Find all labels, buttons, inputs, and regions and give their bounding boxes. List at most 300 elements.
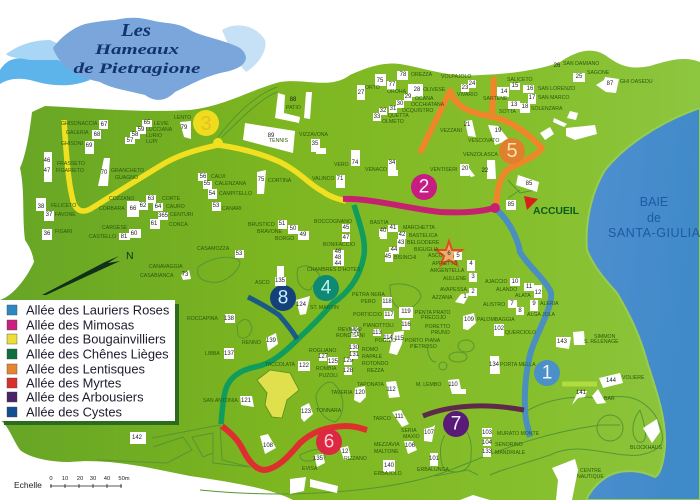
numbered plots: 142 [132, 435, 143, 441]
numbered plots: 85 [508, 202, 515, 208]
accueil label: ACCUEIL [533, 205, 580, 217]
bay label: BAIE [640, 195, 668, 209]
village names: BISINCHI [394, 255, 416, 261]
numbered plots: 8 [518, 308, 522, 314]
numbered plots: 45 [385, 254, 392, 260]
village names: RENNO [242, 340, 261, 346]
route 6: Allée des Myrtes [222, 426, 367, 470]
numbered plots: 38 [38, 204, 45, 210]
village names: PIANOTTOLI [363, 323, 394, 329]
village names: S. RELENAGE [584, 339, 619, 345]
numbered plots: 60 [131, 231, 138, 237]
village names: FELICETO [51, 203, 76, 209]
village names: CANAVAGGIA [149, 264, 183, 270]
route 1: Allée des Lauriers Roses [498, 211, 551, 437]
numbered plots: 51 [279, 221, 286, 227]
route 3: Allée des Bougainvilliers [64, 120, 346, 211]
village names: ERBALUNGA [417, 467, 450, 473]
numbered plots: 10 [512, 279, 519, 285]
scale bar: 0 [49, 476, 53, 482]
numbered plots: 110 [448, 382, 458, 388]
numbered plots: 120 [355, 390, 366, 396]
numbered plots: 141 [576, 390, 587, 396]
village names: QUETTA [388, 113, 409, 119]
village names: OREZZA [411, 72, 433, 78]
marker 2 [411, 174, 437, 200]
numbered plots: 5 [456, 253, 460, 259]
numbered plots: 53 [236, 251, 243, 257]
marker 4 [313, 275, 339, 301]
numbered plots: 48 [335, 255, 342, 261]
numbered plots: 11 [526, 284, 533, 290]
north arrow [42, 250, 134, 295]
village names: RAPALE [362, 354, 383, 360]
scale bar: 20 [77, 476, 83, 482]
village names: AVAPESSA [440, 287, 467, 293]
village names: BELGODERE [407, 240, 440, 246]
village names: EVISA [302, 466, 318, 472]
route 5: Allée des Lentisques [420, 77, 542, 205]
numbered plots: 12 [342, 449, 349, 455]
numbered plots: 41 [390, 225, 397, 231]
numbered plots: 43 [398, 240, 405, 246]
numbered plots: 115 [394, 336, 404, 342]
village names: ST. MARTIN [310, 305, 339, 311]
bay label [608, 195, 700, 240]
numbered plots: 122 [299, 363, 310, 369]
light green path [562, 382, 597, 386]
scale bar: 50m [118, 476, 130, 482]
village names: NAUTIQUE [577, 474, 604, 480]
numbered plots: 42 [399, 232, 406, 238]
reception triangle [524, 196, 538, 210]
village names: ALATA [515, 293, 531, 299]
village names: VENTISERI [430, 167, 457, 173]
numbered plots: 130 [349, 345, 360, 351]
village names: CENTURI [170, 212, 193, 218]
numbered plots: 49 [300, 232, 307, 238]
legend labels [26, 302, 169, 420]
village names: PUZOLI [319, 373, 338, 379]
numbered plots: 27 [358, 90, 365, 96]
numbered plots: 127 [318, 354, 329, 360]
legend labels: Allée des Myrtes [26, 376, 121, 390]
marker 3: 3 [200, 113, 212, 135]
numbered plots: 46 [335, 249, 342, 255]
village names: CASTELLO [89, 234, 116, 240]
numbered plots: 45 [343, 225, 350, 231]
village names: REVINDO [338, 327, 362, 333]
numbered plots: 70 [101, 170, 108, 176]
village names: OLIVESE [423, 87, 446, 93]
village names: VENZOLASCA [463, 152, 498, 158]
numbered plots: 135 [313, 456, 324, 462]
numbered plots: 107 [424, 430, 435, 436]
marker 1 [534, 360, 560, 386]
numbered plots: 68 [94, 132, 101, 138]
route 2: Allée des Mimosas [343, 199, 500, 213]
marker 7: 7 [451, 414, 461, 434]
legend labels: Allée des Cystes [26, 404, 122, 420]
numbered plots: 4 [469, 261, 473, 267]
village names: SALICETO [507, 77, 533, 83]
numbered plots: 3 [471, 274, 475, 280]
village names: CARGESE [102, 225, 128, 231]
numbered plots: 21 [464, 122, 471, 128]
village names: PRUNO [431, 330, 450, 336]
numbered plots: 125 [328, 359, 339, 365]
route 3 junction [213, 138, 223, 148]
village names: POGGIO [375, 338, 396, 344]
village names: CASAMOZZA [197, 246, 230, 252]
village names: ALISTRO [483, 302, 505, 308]
numbered plots: 140 [384, 463, 395, 469]
village names: BLOCKHAUS [630, 445, 663, 451]
numbered plots: 26 [554, 63, 561, 69]
numbered route markers [193, 110, 560, 455]
numbered plots: 22 [482, 168, 489, 174]
marker 2: 2 [419, 176, 429, 198]
numbered plots: 89 [268, 133, 275, 139]
village names: BOCCOGNANO [314, 219, 352, 225]
village names: PETRA NERA [352, 292, 385, 298]
village names: SAN LORENZO [538, 86, 575, 92]
numbered plots: 53 [213, 203, 220, 209]
numbered plots: 78 [400, 72, 407, 78]
numbered plots: 131 [349, 352, 360, 358]
numbered plots: 81 [121, 234, 128, 240]
village names: ROGLIANO [309, 348, 336, 354]
village names: BASTIA [370, 220, 389, 226]
village names: MARCHETTA [403, 225, 435, 231]
numbered plots: 13 [511, 102, 518, 108]
numbered plots: 16 [527, 86, 534, 92]
numbered plots: 139 [266, 338, 277, 344]
numbered plots: 71 [337, 176, 344, 182]
numbered plots: 106 [405, 443, 416, 449]
numbered plots: 117 [384, 312, 394, 318]
village names: BIGUGLIA [414, 247, 439, 253]
village names: CAMPITELLO [219, 191, 252, 197]
village names: AZZANA [432, 295, 453, 301]
village names: BASTELICA [409, 233, 438, 239]
numbered plots: 50 [290, 226, 297, 232]
numbered plots: 61 [151, 221, 158, 227]
village names: GRANCHETO [111, 168, 144, 174]
marker 8: 8 [278, 288, 288, 308]
village names: SIMMON [594, 334, 616, 340]
village names: VOLIERE [622, 375, 645, 381]
numbered plots: 65 [144, 120, 151, 126]
village names: SAN DAMIANO [563, 61, 599, 67]
bay label: SANTA-GIULIA [608, 226, 700, 240]
numbered plots: 132 [350, 329, 361, 335]
village names: BONIFACCIO [323, 242, 355, 248]
title text: Hameaux [94, 42, 180, 58]
numbered plots: 137 [224, 351, 235, 357]
village names: PORTA MELLA [500, 362, 536, 368]
village names: PATIO [286, 105, 301, 111]
numbered plots: 128 [343, 368, 354, 374]
marker 1: 1 [542, 362, 552, 384]
village names: RIZZANO [344, 456, 367, 462]
village names: ROMBIA [316, 366, 337, 372]
village names: PIETROSO [410, 344, 437, 350]
village names: MALTONE [374, 449, 399, 455]
village names: LIBBA [205, 351, 220, 357]
numbered plots: 75 [258, 177, 265, 183]
numbered plots: 108 [263, 443, 274, 449]
numbered plots: 123 [301, 409, 312, 415]
village names: CALENZANA [215, 181, 247, 187]
marker 6: 6 [324, 432, 334, 452]
numbered plots: 33 [374, 114, 381, 120]
village names: GHISONI [61, 141, 83, 147]
numbered plots: 44 [335, 261, 342, 267]
numbered plots: 112 [386, 387, 396, 393]
service tracks and garden outlines [97, 87, 663, 494]
village names: TAVERIA [331, 390, 353, 396]
numbered plots: 47 [343, 235, 350, 241]
village names: FAVONE [55, 212, 76, 218]
village names: SOTTA [499, 109, 516, 115]
village names: CONCA [169, 222, 188, 228]
numbered plots: 62 [140, 203, 147, 209]
village names: SENORINO [495, 442, 523, 448]
village names: GALERIA [66, 130, 89, 136]
village names: ROMO [362, 347, 378, 353]
village names: OCCHIATANA [411, 102, 445, 108]
village names: COZZANO [109, 196, 134, 202]
village names: ASCO [428, 253, 443, 259]
marker 7 [443, 411, 469, 437]
village names: ERBAJOLO [374, 471, 402, 477]
numbered plots: 32 [380, 108, 387, 114]
numbered plots: 18 [522, 104, 529, 110]
numbered plots: 135 [275, 278, 286, 284]
village names: PORTO PIANA [405, 338, 441, 344]
numbered plots: 113 [372, 330, 382, 336]
village names: VOLPAJOLO [441, 74, 471, 80]
numbered plots: 1 [463, 294, 467, 300]
scale bar [14, 476, 130, 490]
north arrow: N [126, 250, 134, 262]
village names: LUPI [146, 139, 158, 145]
numbered plots: 88 [290, 97, 297, 103]
bay label: de [647, 211, 661, 225]
village names [51, 61, 663, 480]
village names: OCQUISTRO [402, 108, 433, 114]
village names: PERO [361, 299, 376, 305]
village names: SAGONE [587, 70, 610, 76]
legend labels: Allée des Lentisques [26, 362, 145, 376]
reception star [436, 241, 462, 265]
numbered plots: 47 [44, 168, 51, 174]
title text: Les [120, 20, 151, 40]
scale bar: Echelle [14, 480, 42, 490]
village names: VIVARIO [457, 92, 478, 98]
scale bar: 40 [104, 476, 110, 482]
village names: CENTRE [580, 468, 602, 474]
village names: CAURO [166, 204, 185, 210]
numbered plots: 85 [526, 181, 533, 187]
numbered plots: 129 [343, 358, 354, 364]
numbered plots: 118 [382, 299, 392, 305]
legend panel [0, 300, 179, 425]
village names: QUERCIOLO [505, 330, 536, 336]
village names: SAN MARCO [538, 95, 569, 101]
village names: LURIO [146, 133, 162, 139]
village names: ASCO [255, 280, 270, 286]
village names: SOLENZARA [531, 106, 563, 112]
village names: GHISONACCIA [61, 121, 98, 127]
numbered plots: 143 [557, 339, 568, 345]
village names: TACCOLATA [265, 362, 296, 368]
village names: BRAVONE [257, 229, 283, 235]
marker 3 [193, 110, 219, 136]
village names: CALVI [211, 174, 226, 180]
village names: TARCO [373, 416, 391, 422]
route 4: Allée des Chênes Lièges [221, 205, 364, 424]
village names: VALINCO [312, 176, 334, 182]
village names: ALGA JOLA [527, 312, 556, 318]
village names: CANARI [222, 206, 242, 212]
numbered plots: 17 [529, 95, 536, 101]
marker 5: 5 [506, 140, 518, 162]
legend labels: Allée des Bougainvilliers [26, 332, 166, 346]
village names: ORTO [365, 85, 380, 91]
numbered plots: 77 [389, 82, 396, 88]
village names: CORTINA [268, 178, 292, 184]
numbered plots: 58 [132, 132, 139, 138]
numbered plots: 133 [482, 449, 493, 455]
village names: MAXIO [403, 434, 420, 440]
numbered plots: 6 [447, 251, 451, 257]
marker 4: 4 [321, 278, 332, 298]
title text: de Pietragione [74, 61, 201, 77]
numbered plots: 64 [155, 204, 162, 210]
title cloud [0, 18, 266, 100]
village names: VESCOVATO [468, 138, 499, 144]
numbered plots: 144 [606, 378, 617, 384]
village names: VERO [334, 162, 349, 168]
numbered plots: 12 [535, 290, 542, 296]
village names: PRECOJO [421, 315, 446, 321]
numbered plots: 2 [471, 289, 475, 295]
village names: MURATO MONTE [497, 431, 540, 437]
numbered plots: 23 [462, 85, 469, 91]
village names: RONDISANI [336, 333, 365, 339]
route 7: Allée des Arbousiers [423, 406, 524, 416]
scale bar: 10 [62, 476, 68, 482]
village names: AULLENE [443, 276, 467, 282]
numbered plots: 73 [182, 272, 189, 278]
route 8: Allée des Cystes [248, 297, 297, 339]
village names: PORETTO [425, 324, 450, 330]
village names: REZZA [367, 368, 385, 374]
numbered plots: 134 [489, 362, 500, 368]
village names: VEZZANI [440, 128, 462, 134]
village names: ARGENTELLA [430, 268, 465, 274]
village names: GUAGNO [115, 175, 138, 181]
village names: PALOMBAGGIA [477, 317, 515, 323]
numbered plots: 15 [512, 83, 519, 89]
village names: OLMETO [382, 119, 404, 125]
numbered plots: 9 [532, 301, 536, 307]
numbered plots: 40 [380, 228, 387, 234]
numbered plots [36, 63, 623, 472]
village names: SARTENE [483, 96, 508, 102]
marker 6 [316, 429, 342, 455]
numbered plots: 20 [462, 166, 469, 172]
village names: TAPONATA [357, 382, 384, 388]
village names: CORTE [162, 196, 181, 202]
scale bar: 30 [90, 476, 96, 482]
numbered plots: 35 [312, 141, 319, 147]
village names: LUCCIANA [146, 127, 173, 133]
village names: FRASSETO [57, 161, 85, 167]
title text [74, 20, 201, 77]
village names: TENNIS [269, 138, 289, 144]
marker 5 [499, 138, 525, 164]
numbered plots: 79 [181, 125, 188, 131]
numbered plots: 30 [397, 101, 404, 107]
numbered plots: 55 [204, 181, 211, 187]
numbered plots: 46 [44, 158, 51, 164]
village names: CORBARA [99, 206, 125, 212]
village names: ALANDO [496, 287, 517, 293]
numbered plots: 31 [390, 106, 397, 112]
village names: AJACCIO [485, 279, 507, 285]
legend labels: Allée des Lauriers Roses [26, 302, 169, 318]
numbered plots: 119 [401, 309, 411, 315]
numbered plots: 101 [429, 456, 440, 462]
numbered plots: 67 [101, 122, 108, 128]
numbered plots: 116 [401, 322, 411, 328]
numbered plots: 24 [469, 81, 476, 87]
legend swatches [7, 305, 17, 417]
marker 8 [270, 285, 296, 311]
numbered plots: 25 [576, 74, 583, 80]
numbered plots: 104 [482, 440, 493, 446]
numbered plots: 111 [394, 414, 404, 420]
numbered plots: 29 [405, 94, 412, 100]
large white buildings [44, 111, 660, 500]
numbered plots: 59 [138, 127, 145, 133]
numbered plots: 56 [200, 174, 207, 180]
village names: ALERIA [540, 301, 559, 307]
village names: VIZZAVONA [299, 132, 329, 138]
village names: LEVIE [154, 121, 169, 127]
village names: SERIA [401, 428, 417, 434]
village names: CHAMBRES D'HOTES [307, 267, 361, 273]
numbered plots: 14 [501, 89, 508, 95]
legend labels: Allée des Chênes Lièges [26, 346, 169, 362]
village names: FIGARI [55, 229, 72, 235]
village names: MANDRIALE [495, 450, 526, 456]
numbered plots: 36 [44, 231, 51, 237]
numbered plots: 114 [383, 335, 393, 341]
numbered plots: 63 [148, 196, 155, 202]
village names: BAR [604, 396, 615, 402]
numbered plots: 57 [127, 138, 134, 144]
legend labels: Allée des Arbousiers [26, 390, 144, 404]
numbered plots: 74 [352, 160, 359, 166]
numbered plots: 66 [130, 206, 137, 212]
village names: TONNARA [316, 408, 342, 414]
numbered plots: 138 [224, 316, 235, 322]
numbered plots: 7 [510, 301, 514, 307]
